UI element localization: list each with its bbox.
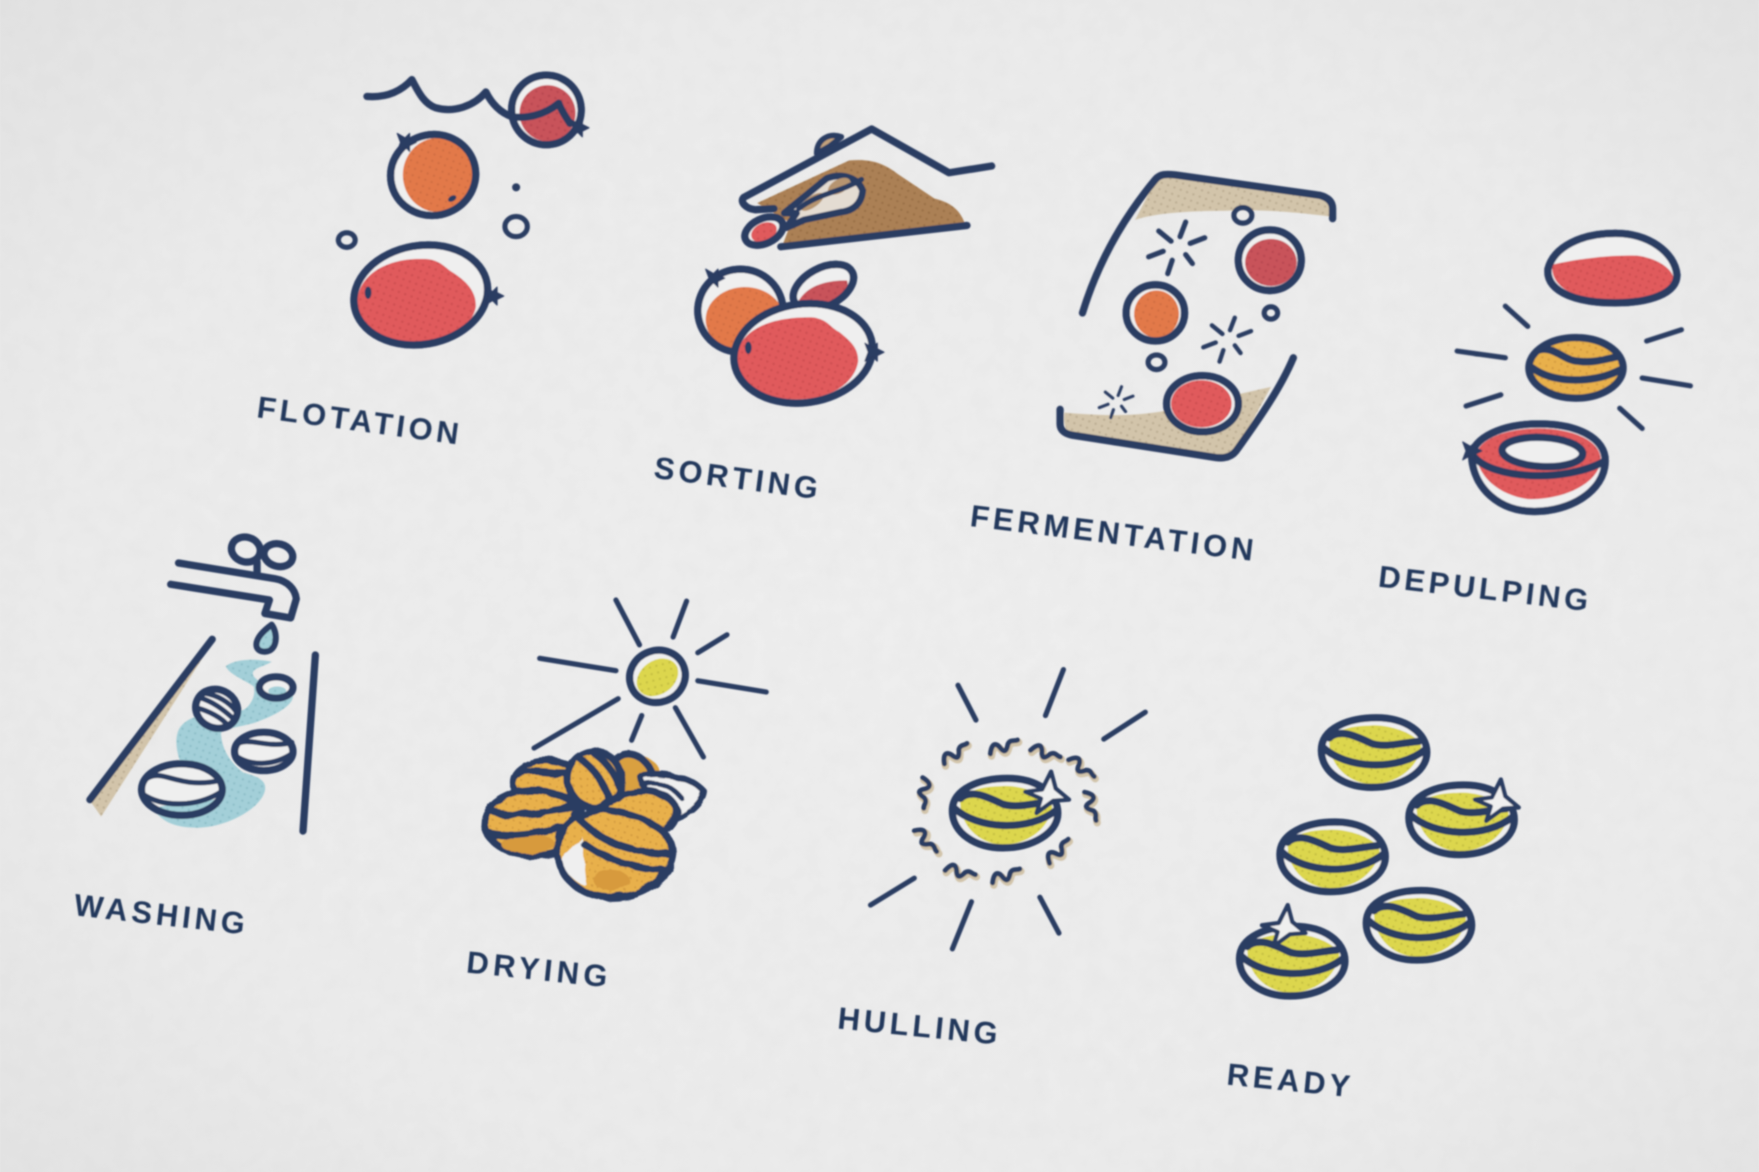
small bean: [259, 677, 293, 698]
bubbles and sparks: [1099, 207, 1278, 418]
icon group: depulping: [1457, 233, 1690, 511]
icon group: washing: [90, 534, 315, 831]
big red cherry: [346, 235, 504, 355]
red cherry: [1167, 376, 1238, 432]
bean: [1529, 338, 1623, 398]
rays: [871, 670, 1145, 949]
icon group: ready beans: [1240, 718, 1519, 996]
bottom half of skin: [1463, 424, 1605, 511]
orange cherry: [383, 127, 483, 223]
tank liquid fills: [1064, 176, 1332, 457]
top cherry on the surface: [506, 70, 589, 150]
label: depulping: DEPULPING: [1377, 559, 1590, 618]
water drop: [256, 625, 276, 652]
husk squiggles: [914, 740, 1097, 885]
label: drying: DRYING: [465, 945, 609, 994]
icon group: drying: [485, 600, 766, 897]
bean: [1280, 822, 1385, 892]
icon group: fermentation: [1060, 174, 1333, 458]
icon group: flotation: [338, 70, 589, 355]
tank outline: [1060, 174, 1333, 458]
icon group: hulling: [871, 670, 1145, 949]
big red cherry: [728, 295, 884, 412]
bubbles: [338, 183, 527, 247]
middle bean: [235, 732, 293, 770]
rays: [1457, 306, 1690, 428]
bean with star: [1240, 905, 1345, 996]
label: ready: READY: [1225, 1057, 1352, 1104]
hand with brown skin: [742, 129, 992, 247]
bean with star: [1409, 779, 1519, 855]
bean: [1366, 890, 1472, 960]
water wave line: [367, 80, 570, 123]
orange cherry: [1126, 285, 1185, 341]
sun rays: [534, 600, 766, 757]
sun: [622, 642, 693, 710]
bean: [1321, 718, 1427, 787]
faucet: [171, 534, 296, 618]
large bean: [142, 764, 222, 815]
dark striped bean: [189, 683, 244, 735]
icon group: sorting: [698, 129, 992, 412]
dark red cherry: [1238, 230, 1301, 290]
label: washing: WASHING: [72, 887, 247, 941]
water stream: [154, 660, 293, 828]
orange cherry: [698, 269, 784, 352]
small dark cherry: [786, 255, 861, 319]
beige wall shadow: [90, 648, 209, 816]
glass walls: [90, 639, 315, 831]
small cherry held in the fingers: [740, 211, 787, 251]
hulled bean with star: [952, 772, 1069, 848]
pile of drying beans: [485, 744, 703, 897]
label: fermentation: FERMENTATION: [968, 498, 1255, 568]
label: hulling: HULLING: [836, 1001, 999, 1051]
label: flotation: FLOTATION: [255, 389, 461, 451]
top half of skin: [1548, 233, 1677, 303]
label: sorting: SORTING: [652, 450, 820, 506]
